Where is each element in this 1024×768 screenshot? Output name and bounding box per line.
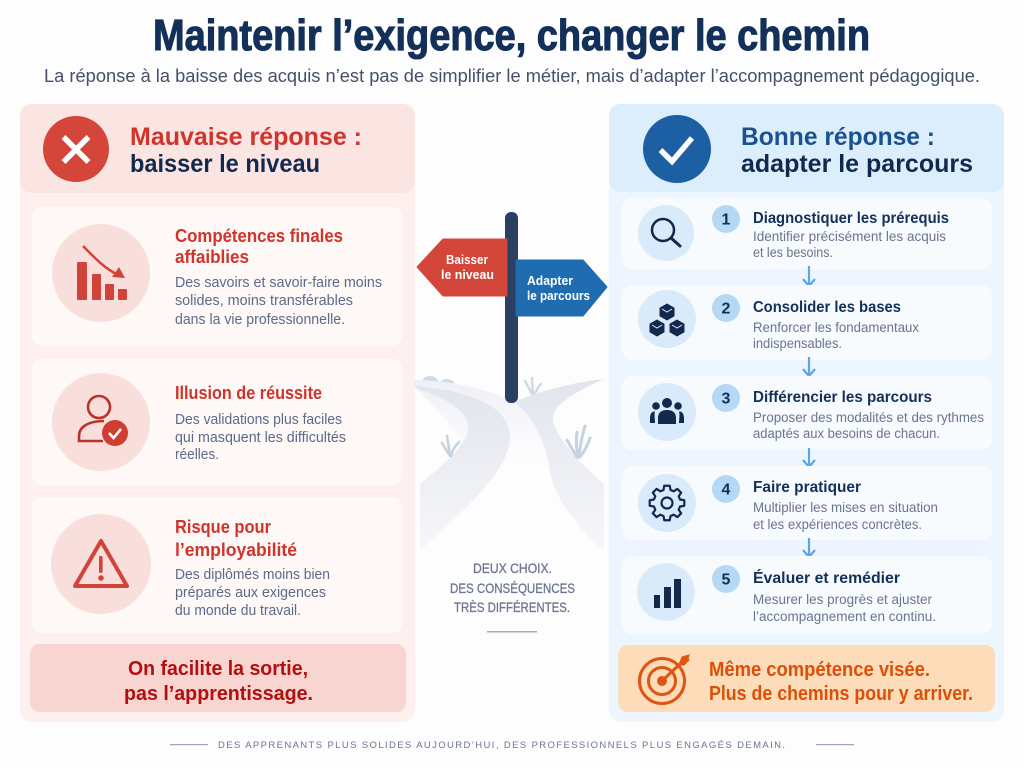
- arrow 2 to 3: [803, 357, 815, 376]
- text: compétences finales affaiblies: Compétences finales: [175, 226, 343, 246]
- icon: target with arrow: [640, 655, 689, 704]
- icon: group of people: [638, 383, 696, 441]
- arrow 4 to 5: [803, 538, 815, 557]
- panel: mauvaise réponse: [20, 104, 415, 722]
- panel header: bonne réponse: [609, 104, 1004, 192]
- step 1: [622, 198, 992, 269]
- center caption: DES CONSÉQUENCES: [450, 580, 575, 596]
- heading: bonne réponse: [741, 123, 973, 178]
- text: step 5: Évaluer et remédier: [753, 570, 900, 587]
- rocks and grass behind the road: [421, 376, 541, 396]
- icon: cubes: [638, 290, 696, 348]
- text: step 5: [753, 570, 936, 624]
- panel: bonne réponse: [609, 104, 1004, 722]
- text: risque pour l'employabilité: du monde du travail.: [175, 603, 301, 619]
- text: step 5: Mesurer les progrès et ajuster: [753, 592, 932, 607]
- text: step 4: Faire pratiquer: [753, 479, 861, 496]
- number 2: 2: [722, 300, 731, 318]
- number 3: 3: [722, 390, 731, 408]
- text: illusion de réussite: Des validations plus faciles: [175, 412, 342, 428]
- road: right branch: [515, 379, 604, 551]
- text: step 4: Multiplier les mises en situation: [753, 500, 938, 515]
- text: risque pour l'employabilité: l’employabilité: [175, 540, 297, 560]
- subtitle: La réponse à la baisse des acquis n’est pas de simplifier le métier, mais d’adapter l’accompagnement pédagogique.: [44, 65, 980, 86]
- number 1: 1: [722, 212, 731, 228]
- text: compétences finales affaiblies: Des savoirs et savoir-faire moins: [175, 275, 382, 291]
- icon: check mark: [643, 115, 711, 183]
- icon: red cross: [43, 116, 109, 182]
- text: compétences finales affaiblies: affaiblies: [175, 247, 249, 267]
- text: risque pour l'employabilité: préparés aux exigences: [175, 585, 326, 601]
- center caption: TRÈS DIFFÉRENTES.: [454, 599, 570, 615]
- road: left branch lower: [415, 386, 510, 551]
- callout text: Même compétence visée.: [709, 658, 930, 681]
- callout text: [709, 658, 973, 705]
- text: risque pour l'employabilité: Des diplômés moins bien: [175, 567, 330, 583]
- sign: adapter le parcours: le parcours: [527, 289, 590, 303]
- arrow 3 to 4: [803, 448, 815, 467]
- text: compétences finales affaiblies: solides, moins transférables: [175, 293, 353, 309]
- center caption: [450, 560, 575, 632]
- heading: mauvaise réponse: Mauvaise réponse :: [130, 123, 362, 151]
- arrow 1 to 2: [803, 266, 815, 286]
- number 3: [712, 384, 740, 412]
- sign: baisser le niveau: [417, 239, 507, 296]
- text: step 3: Proposer des modalités et des rythmes: [753, 410, 984, 425]
- card: illusion de réussite: [32, 359, 402, 485]
- number 1: [712, 205, 740, 233]
- step 5: [622, 556, 992, 634]
- callout: on facilite la sortie: pas l’apprentissage.: [124, 682, 313, 705]
- icon: falling bar chart: [52, 224, 150, 322]
- post: [505, 212, 518, 403]
- sign: adapter le parcours: Adapter: [527, 274, 573, 288]
- text: step 3: [753, 389, 984, 441]
- text: compétences finales affaiblies: [175, 226, 382, 328]
- text: illusion de réussite: réelles.: [175, 447, 219, 463]
- grass tufts: [442, 426, 590, 457]
- text: step 3: adaptés aux besoins de chacun.: [753, 426, 940, 441]
- number 4: 4: [722, 482, 731, 498]
- text: step 3: Différencier les parcours: [753, 389, 932, 406]
- text: risque pour l'employabilité: Risque pour: [175, 517, 271, 537]
- text: illusion de réussite: Illusion de réussite: [175, 383, 322, 403]
- text: step 2: indispensables.: [753, 336, 842, 351]
- step 2: [622, 285, 992, 360]
- callout text: Plus de chemins pour y arriver.: [709, 682, 973, 705]
- text: illusion de réussite: qui masquent les difficultés: [175, 430, 346, 446]
- heading: bonne réponse: adapter le parcours: [741, 150, 973, 178]
- sign: adapter le parcours: [516, 260, 607, 316]
- text: step 1: Diagnostiquer les prérequis: [753, 210, 949, 227]
- number 5: 5: [722, 572, 731, 588]
- text: step 1: et les besoins.: [753, 245, 833, 260]
- icon: rising bars: [637, 563, 695, 621]
- text: step 5: l’accompagnement en continu.: [753, 609, 936, 624]
- icon: person with check: [52, 373, 150, 471]
- callout: même compétence visée: [618, 645, 995, 712]
- number 5: [712, 565, 740, 593]
- text: compétences finales affaiblies: dans la vie professionnelle.: [175, 312, 345, 328]
- illustration: crossroads signpost: [415, 212, 607, 551]
- text: step 1: [753, 210, 949, 260]
- number 4: [712, 475, 740, 503]
- sign: baisser le niveau: Baisser: [446, 253, 488, 267]
- text: illusion de réussite: [175, 383, 346, 463]
- callout: on facilite la sortie: On facilite la sortie,: [128, 657, 308, 680]
- center caption: DEUX CHOIX.: [473, 560, 552, 576]
- icon: magnifier: [638, 205, 694, 261]
- text: step 1: Identifier précisément les acquis: [753, 229, 946, 244]
- icon: gear: [638, 474, 696, 532]
- card: risque pour l'employabilité: [32, 497, 402, 633]
- heading: mauvaise réponse: [130, 123, 362, 178]
- callout: on facilite la sortie: [30, 644, 406, 712]
- sign: baisser le niveau: le niveau: [441, 268, 494, 282]
- heading: mauvaise réponse: baisser le niveau: [130, 150, 320, 178]
- road: left branch: [415, 380, 549, 466]
- panel header: mauvaise réponse: [20, 104, 415, 193]
- step 4: [622, 466, 992, 540]
- text: step 4: et les expériences concrètes.: [753, 517, 922, 532]
- text: step 2: Renforcer les fondamentaux: [753, 320, 919, 335]
- card: compétences finales affaiblies: [32, 207, 402, 346]
- text: risque pour l'employabilité: [175, 517, 330, 619]
- icon: warning triangle: [51, 514, 151, 614]
- number 2: [712, 294, 740, 322]
- title: Maintenir l’exigence, changer le chemin: [153, 11, 870, 60]
- step 3: [622, 376, 992, 450]
- text: step 4: [753, 479, 938, 532]
- text: step 2: [753, 299, 919, 351]
- text: step 2: Consolider les bases: [753, 299, 901, 316]
- footer tagline: DES APPRENANTS PLUS SOLIDES AUJOURD’HUI, DES PROFESSIONNELS PLUS ENGAGÉS DEMAIN.: [218, 740, 785, 751]
- heading: bonne réponse: Bonne réponse :: [741, 123, 935, 151]
